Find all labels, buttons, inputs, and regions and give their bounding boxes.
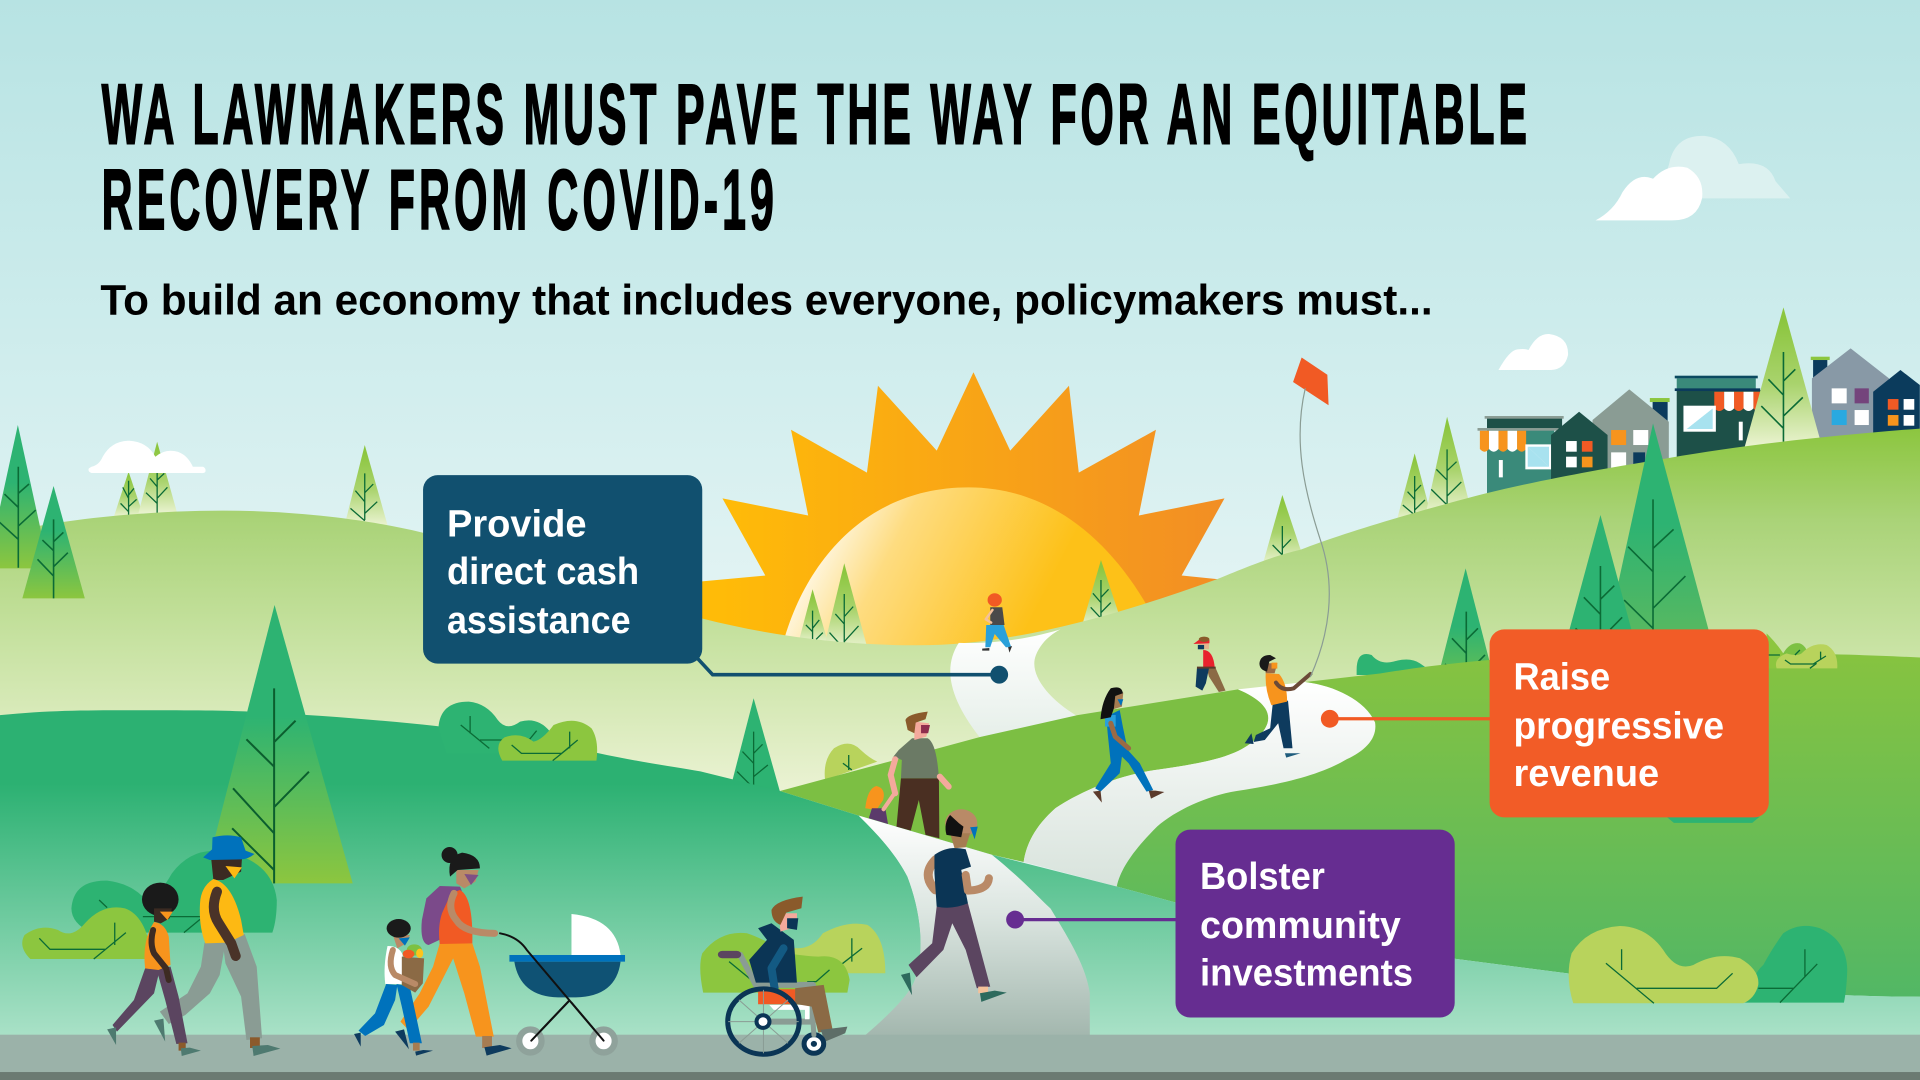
- tree: tall right: [1604, 423, 1713, 647]
- connector line: [1330, 717, 1490, 720]
- figures on left: [107, 835, 625, 1056]
- bush: lime small: [22, 907, 152, 959]
- dark house: [1551, 412, 1608, 483]
- bush: teal: [438, 702, 550, 753]
- person: visor walker: [1193, 637, 1226, 692]
- bush: teal peeking below orange box: [1667, 817, 1760, 823]
- figures in middle: [718, 593, 1310, 1054]
- storefront with orange awning: [1478, 416, 1564, 497]
- village-side trees on right hill: [1565, 423, 1713, 647]
- tree: behind front hill: [730, 698, 780, 793]
- bushes on front hill: [438, 702, 597, 761]
- person: child with grocery bag: [354, 919, 433, 1056]
- bush: pale: [787, 924, 885, 973]
- front left hill: [0, 710, 921, 1036]
- bush: pair behind orange box: [1767, 633, 1837, 668]
- tree: on hill near kite: [1263, 495, 1302, 564]
- box: [1176, 830, 1455, 1018]
- storefront with red awning: [1675, 376, 1761, 462]
- cloud: left: [89, 441, 206, 473]
- callout: provide direct cash assistance: [423, 475, 1008, 684]
- sun rays: [686, 372, 1224, 649]
- box text: investments: [1200, 953, 1413, 995]
- lower path: [857, 816, 1090, 1036]
- tree: big foreground left: [203, 605, 353, 883]
- stroller: [500, 914, 625, 1056]
- tree: far left: [0, 425, 49, 568]
- callout: bolster community investments: [1006, 830, 1455, 1018]
- box text: progressive: [1513, 705, 1724, 747]
- person: small child with yellow hair: [865, 786, 893, 824]
- connector line: [697, 658, 999, 675]
- box text: Raise: [1513, 656, 1610, 698]
- tree: larger left of sun: [824, 563, 867, 648]
- far right village: [1397, 307, 1920, 520]
- sidewalk: [0, 1035, 1920, 1073]
- bush: lime: [498, 721, 597, 761]
- connector dot: [1006, 911, 1024, 929]
- connector dot: [1321, 710, 1339, 728]
- title: [102, 67, 1527, 248]
- tree: right of sun: [1082, 560, 1120, 627]
- bush: teal: [1743, 926, 1847, 1003]
- tree: second left: [22, 486, 85, 598]
- person: nurse in blue scrubs: [1093, 687, 1164, 803]
- cloud: top right pair: [1596, 136, 1790, 220]
- back trees on left hill: [114, 442, 388, 525]
- person: adult in blue hat: [154, 835, 280, 1056]
- middle green hill: [780, 689, 1268, 862]
- title: WA LAWMAKERS MUST PAVE THE WAY FOR AN EQUITABLE: [102, 67, 1527, 162]
- bush: lime: [1569, 926, 1758, 1003]
- bushes behind wheelchair: [700, 924, 885, 993]
- bushes lower left: [22, 851, 277, 959]
- tree: short right: [1565, 515, 1636, 647]
- bush: pale near man: [825, 744, 877, 780]
- box: [1490, 629, 1769, 817]
- box text: assistance: [447, 600, 631, 642]
- tree: pale tall between houses: [1745, 307, 1820, 447]
- sun: [686, 372, 1224, 661]
- connector line: [1015, 918, 1177, 921]
- box text: revenue: [1513, 753, 1659, 795]
- upper white path: [950, 629, 1078, 737]
- trees in front of sun: [798, 560, 1120, 648]
- box text: direct cash: [447, 551, 639, 593]
- title: RECOVERY FROM COVID-19: [102, 153, 774, 248]
- bush: teal large: [71, 851, 277, 933]
- person: woman pushing stroller: [395, 847, 512, 1056]
- box text: community: [1200, 905, 1401, 947]
- person: bald man jogging: [901, 809, 1007, 1002]
- bushes bottom right: [1569, 926, 1847, 1003]
- person: child with afro: [107, 883, 201, 1056]
- left hill trees: [0, 425, 85, 598]
- tree: small pale left: [114, 472, 144, 517]
- blue-gray house: [1811, 348, 1889, 443]
- person: man holding child's hand: [891, 712, 949, 838]
- tree: small left of sun: [798, 589, 828, 643]
- gray house: [1593, 389, 1670, 477]
- box text: Provide: [447, 503, 587, 545]
- tree: mid hill right: [1428, 568, 1503, 715]
- tree: pale pair by village: [1397, 417, 1472, 520]
- sun disc: [779, 487, 1163, 661]
- connector dot: [990, 666, 1008, 684]
- teal foreground meadow: [857, 816, 1920, 1036]
- box text: Bolster: [1200, 856, 1325, 898]
- person: walking toward sun: [982, 593, 1012, 653]
- winding white path: [1024, 682, 1375, 887]
- right green hill: [1117, 653, 1920, 997]
- cloud: above village: [1498, 334, 1568, 370]
- curb: [0, 1072, 1920, 1080]
- wheelchair user: [718, 897, 847, 1054]
- box: [423, 475, 702, 664]
- bush: lime: [700, 933, 850, 993]
- subtitle: To build an economy that includes everyone, policymakers must...: [100, 277, 1433, 325]
- bush: teal behind tree: [1357, 654, 1437, 675]
- kite and string: [1293, 358, 1329, 677]
- pale back hill: [0, 429, 1920, 857]
- person: flying kite: [1245, 655, 1310, 758]
- tree: pale behind cloud: [138, 442, 177, 513]
- tree: pale on ridge: [345, 445, 388, 525]
- callout: raise progressive revenue: [1321, 629, 1769, 817]
- navy house: [1873, 370, 1920, 440]
